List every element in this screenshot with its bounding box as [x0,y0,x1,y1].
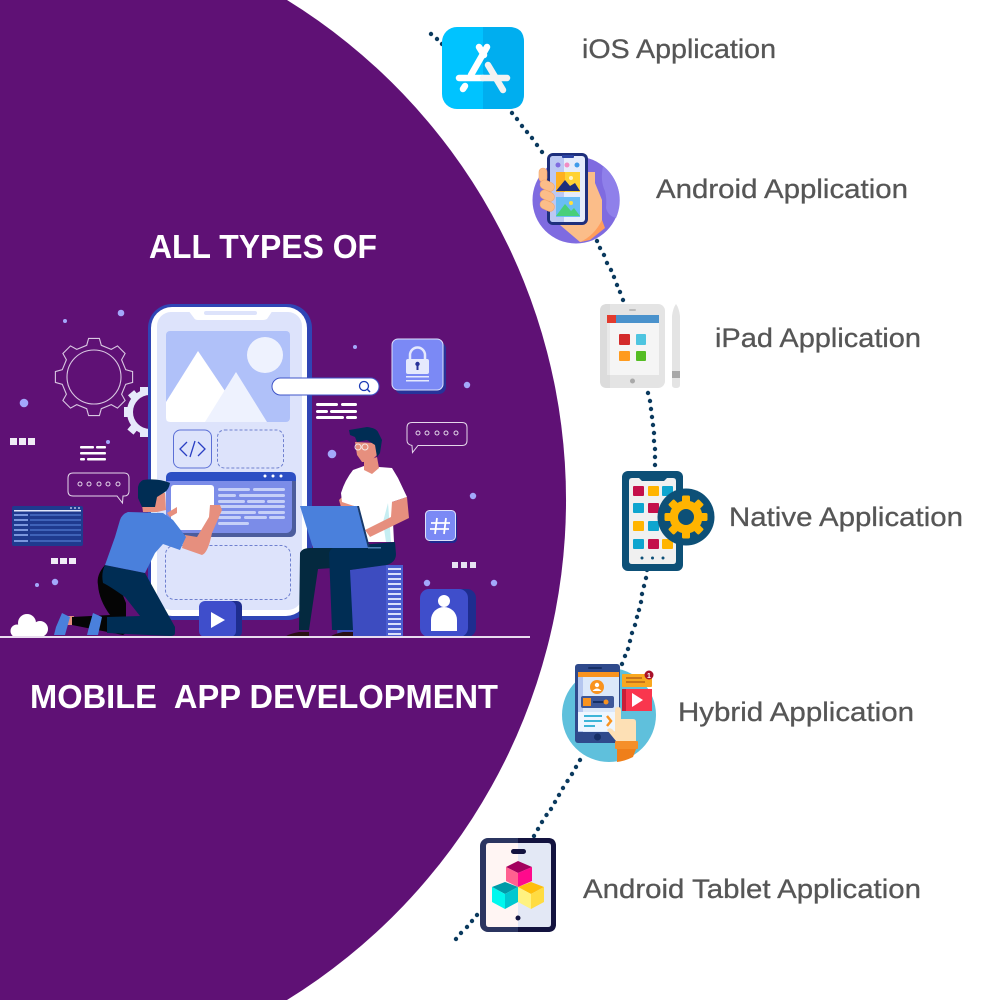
icon: hybrid app [562,664,656,762]
label: android: Android Application [656,174,908,204]
browser window [166,472,296,537]
text lines right [316,403,357,419]
near arm [182,505,222,555]
neck and face [142,493,166,512]
shirt [105,512,186,573]
notch [188,310,273,320]
icon: android tablet with cubes [480,838,556,932]
speech bubble left [68,473,129,503]
dashed box upper [218,430,284,468]
seat block [337,565,403,637]
speech bubble right [407,422,467,452]
far arm [339,497,355,507]
face [355,442,377,462]
figure: kneeling man [54,479,222,636]
arm [365,497,409,537]
phone mockup [148,304,312,620]
illustration: app development scene [0,304,530,638]
purple semicircle panel [0,0,566,1000]
icon: hashtag [426,510,457,543]
icon: cloud [10,614,48,638]
phone body [148,304,312,620]
neck [364,457,379,474]
shirt shadow [383,503,391,542]
icon: iPad and pencil [600,304,680,388]
icon: native phone with gear [622,471,714,571]
label: iOS: iOS Application [582,34,776,64]
glasses [355,444,368,450]
code box [174,430,212,468]
decorative dots [20,310,497,587]
front leg [102,565,175,636]
figure: seated man [285,427,409,637]
front leg [329,542,396,630]
icon: android phone in hand [532,153,620,244]
ground line [0,636,530,638]
shoes [285,632,353,637]
icon: user [420,589,476,637]
back leg [299,548,337,630]
shoes [54,613,102,635]
image placeholder [166,331,290,422]
label: iPad: iPad Application [715,323,921,353]
icon: padlock [392,339,446,394]
heading: mobile app development: MOBILE APP DEVELOPMENT [30,678,498,715]
squares left bottom [51,558,76,564]
heading: all types of: ALL TYPES OF [149,228,377,265]
icon: play button [199,601,242,637]
label: hybrid: Hybrid Application [678,697,914,727]
laptop [300,506,381,548]
dotted connector path [429,32,657,941]
far hand [167,507,177,517]
icon: white gear behind phone [124,387,170,437]
label: android tablet: Android Tablet Application [583,874,921,904]
back leg [72,565,126,635]
icon: iOS app store [442,27,524,109]
hair [349,427,382,457]
white squares right [452,562,476,568]
icon: hybrid app: 1 [647,673,651,680]
squares left top [10,438,35,445]
ankles [65,616,107,625]
shirt [341,466,407,542]
data table panel [12,506,83,546]
text lines left [80,446,106,460]
icon: outline gear [55,338,133,416]
hair [138,479,170,507]
dashed box lower [166,546,290,600]
label: native: Native Application [729,502,963,532]
search bar [272,378,379,395]
